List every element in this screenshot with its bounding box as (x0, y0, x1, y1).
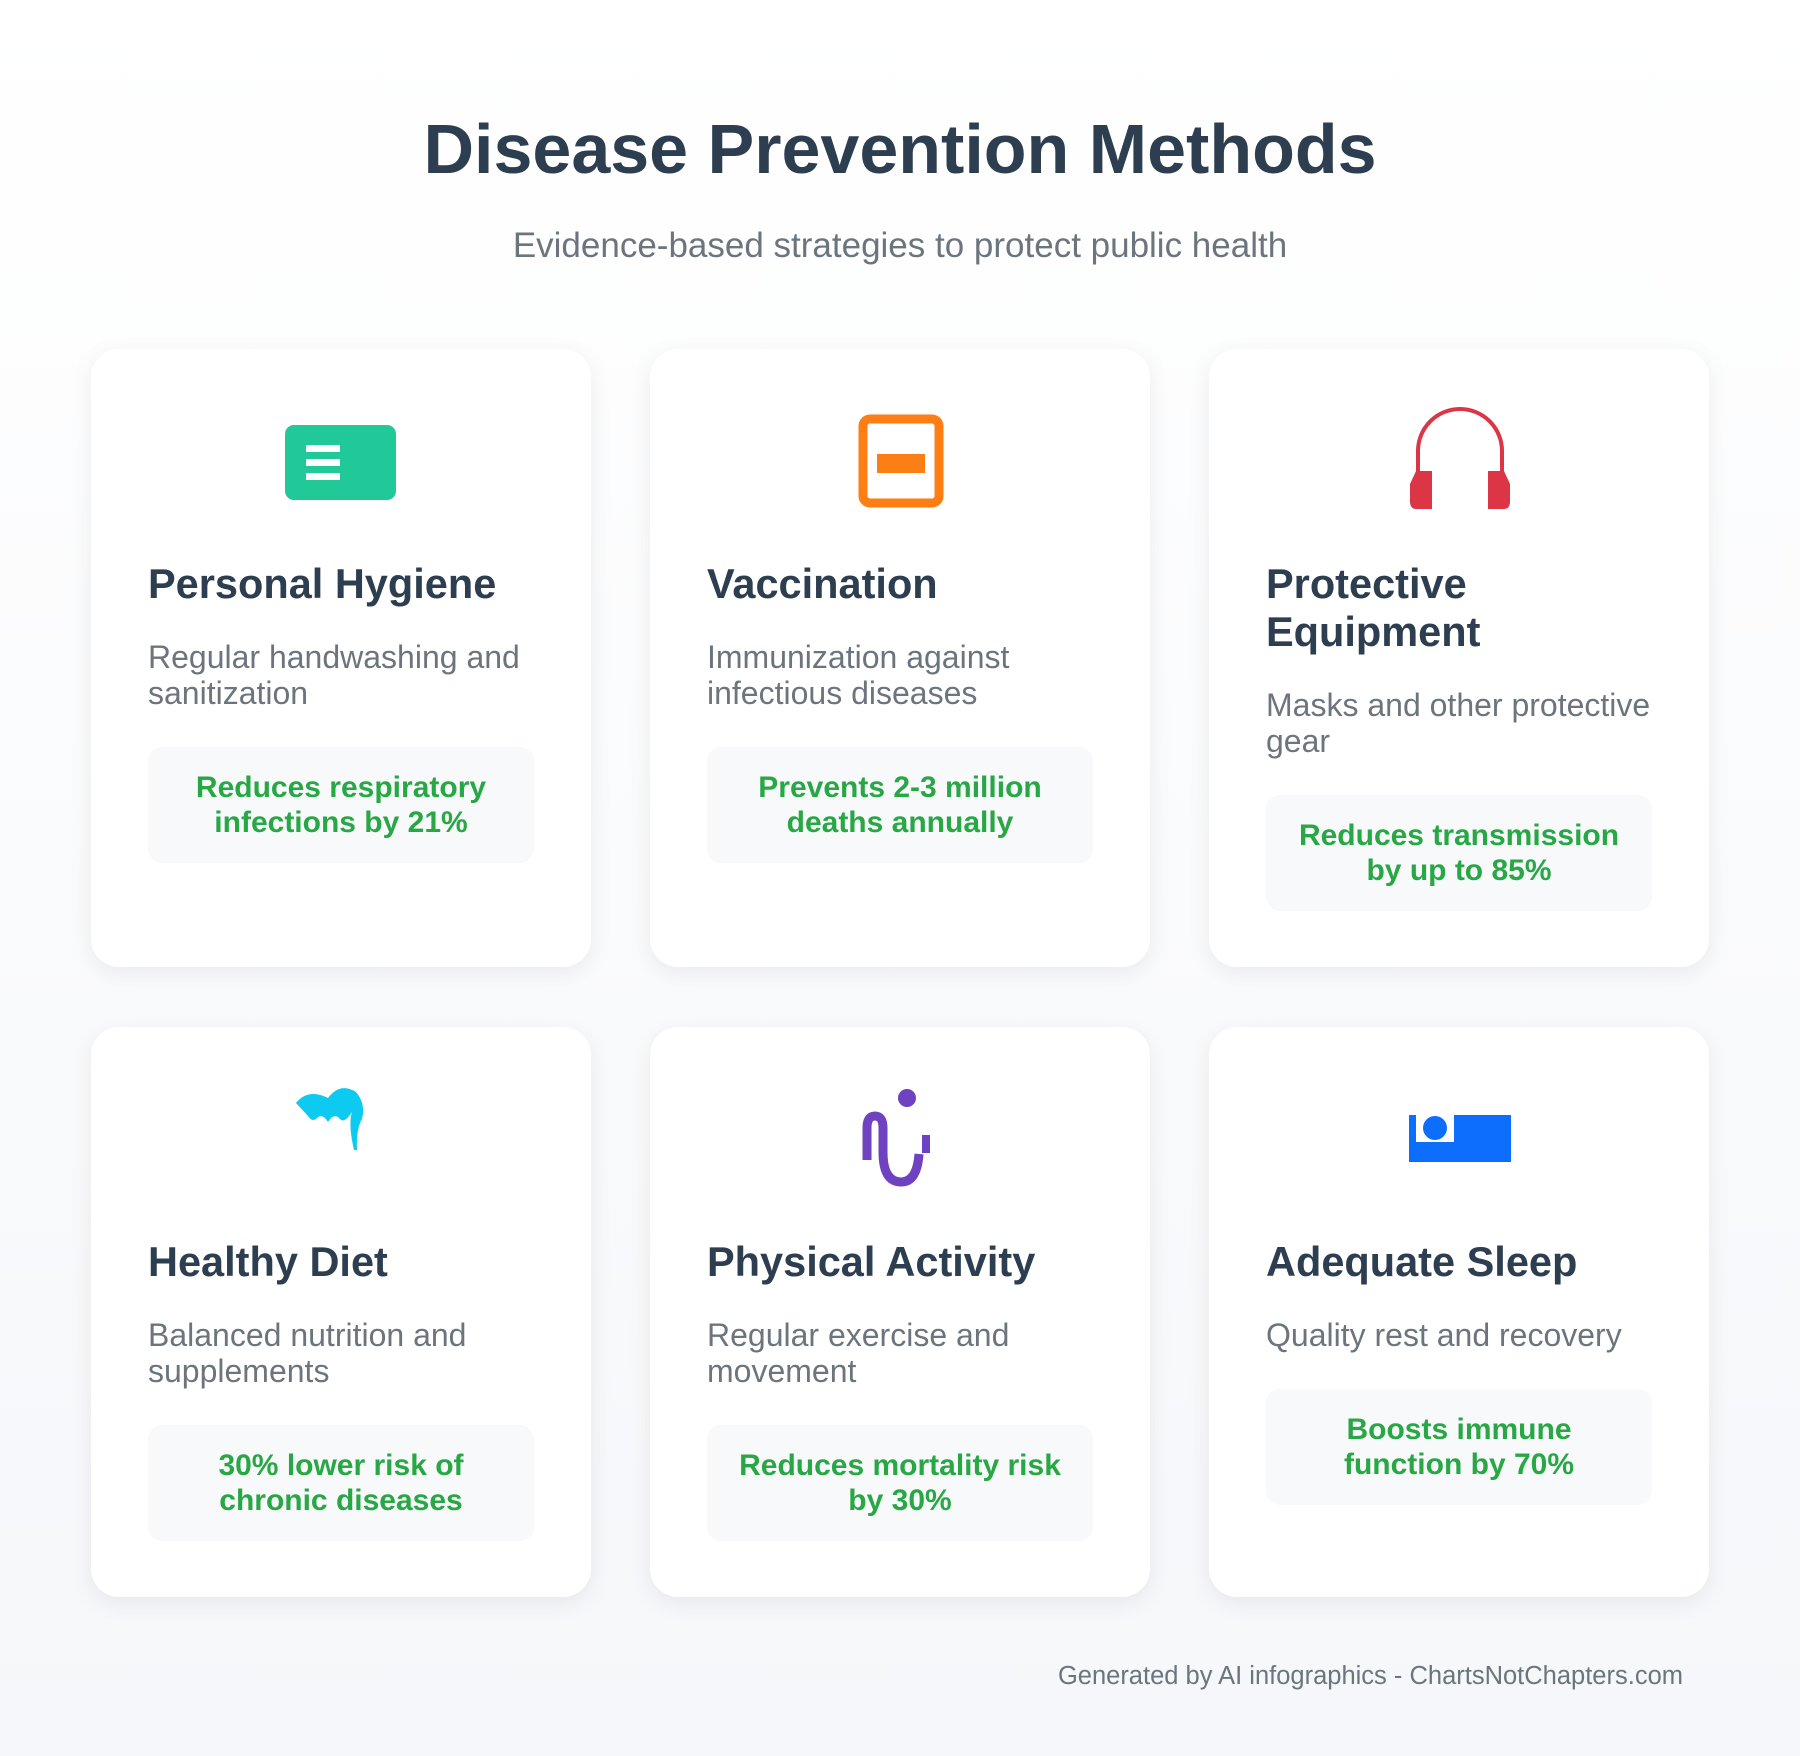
stat (707, 747, 1093, 863)
footer: Generated by AI infographics - ChartsNotChapters.com (1058, 1662, 1683, 1690)
stat: Reduces transmission by up to 85% (1299, 819, 1619, 887)
icon: bed (1409, 1115, 1511, 1162)
description: Immunization against infectious diseases (707, 639, 1009, 711)
description: Regular exercise and movement (707, 1317, 1009, 1389)
subtitle: Evidence-based strategies to protect public health (513, 226, 1287, 265)
icon: activity (862, 1089, 930, 1186)
description: Quality rest and recovery (1266, 1317, 1622, 1353)
panel: healthy diet (91, 1027, 591, 1597)
stat: Reduces mortality risk by 30% (739, 1449, 1061, 1517)
heading: Healthy Diet (148, 1238, 388, 1285)
panel: personal hygiene (91, 349, 591, 967)
stat: Boosts immune function by 70% (1344, 1413, 1574, 1481)
description: Masks and other protective gear (1266, 687, 1650, 759)
panel: protective equipment (1209, 349, 1709, 967)
stat (148, 1425, 534, 1541)
icon: vaccine box (858, 414, 944, 508)
stat (707, 1425, 1093, 1541)
title: Disease Prevention Methods (423, 110, 1377, 188)
icon: tooth-like shape (296, 1088, 364, 1150)
icon: headphones (1410, 407, 1510, 509)
stat (148, 747, 534, 863)
stat: Prevents 2-3 million deaths annually (758, 771, 1042, 839)
stat: 30% lower risk of chronic diseases (218, 1449, 464, 1517)
description: Balanced nutrition and supplements (148, 1317, 466, 1389)
icon: document (285, 425, 396, 500)
panel: vaccination (650, 349, 1150, 967)
heading: Protective Equipment (1266, 560, 1480, 655)
stat: Reduces respiratory infections by 21% (196, 771, 486, 839)
stat (1266, 1389, 1652, 1505)
heading: Adequate Sleep (1266, 1238, 1577, 1285)
heading: Physical Activity (707, 1238, 1035, 1285)
description: Regular handwashing and sanitization (148, 639, 520, 711)
panel: physical activity (650, 1027, 1150, 1597)
panel: adequate sleep (1209, 1027, 1709, 1597)
heading: Vaccination (707, 560, 938, 607)
stat (1266, 795, 1652, 911)
heading: Personal Hygiene (148, 560, 496, 607)
